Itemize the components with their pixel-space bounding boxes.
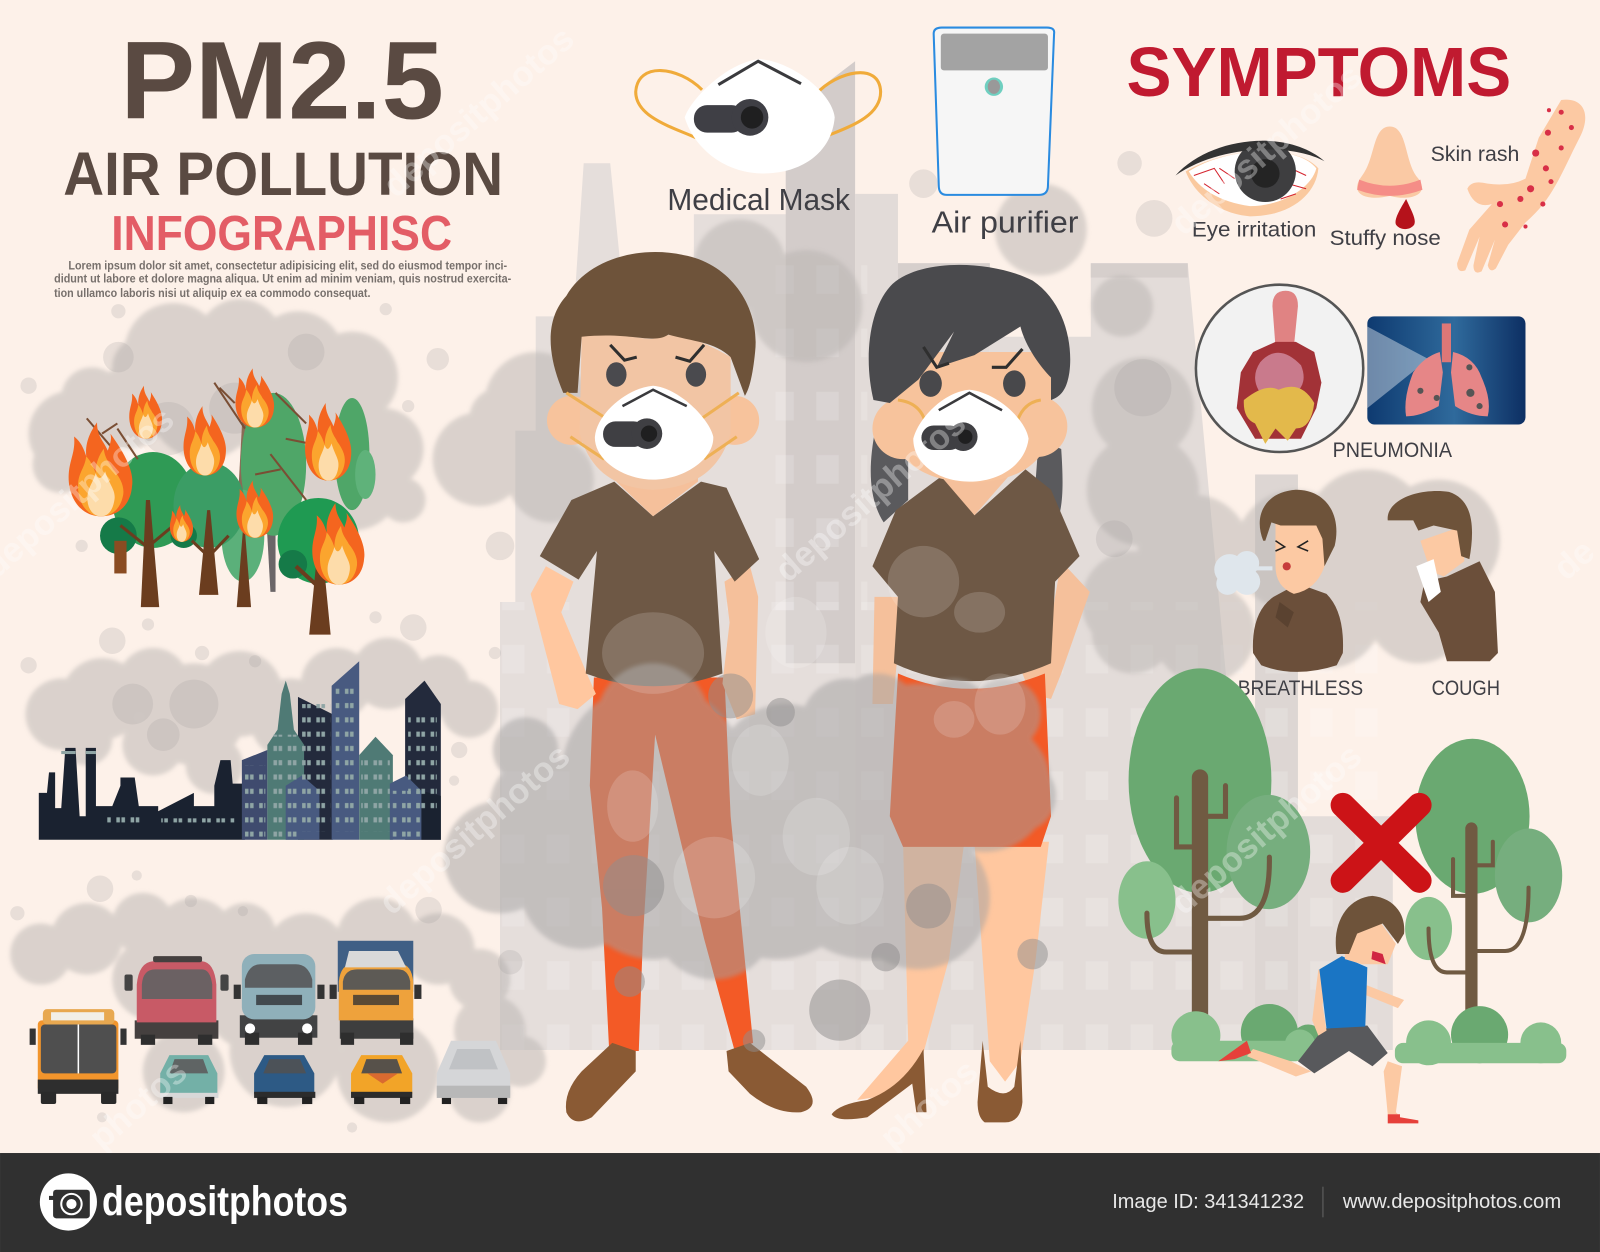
icon: nose [1357, 127, 1422, 229]
icon: teal car [160, 1055, 218, 1104]
figure: breathless man [1214, 490, 1343, 672]
icon: red truck [125, 956, 229, 1045]
icon: teal truck [234, 954, 325, 1045]
figure: coughing man [1388, 491, 1498, 661]
shoes [1388, 1114, 1418, 1123]
icon: camera logo [40, 1173, 97, 1231]
watermark: depositphotos [1164, 57, 1369, 243]
logo wordmark: depositphotos [102, 1177, 348, 1224]
right tree [1405, 739, 1562, 1020]
footer bar [0, 1153, 1600, 1252]
ears [872, 398, 934, 459]
forest fire smoke [20, 299, 449, 641]
skyscrapers [242, 750, 267, 840]
flames [69, 368, 364, 585]
watermark: depositphotos [768, 404, 973, 590]
website url: www.depositphotos.com [1342, 1191, 1561, 1213]
icon: grey car [437, 1041, 510, 1104]
left tree [1118, 668, 1310, 1025]
legs [1384, 1061, 1402, 1114]
smoke over figures [444, 546, 1056, 1052]
heading: infographisc: INFOGRAPHISC [111, 207, 452, 261]
illustration: vehicles [30, 941, 510, 1104]
illustration: forest fire [69, 368, 376, 635]
label: breathless: BREATHLESS [1238, 676, 1363, 700]
icon: orange car [351, 1055, 412, 1104]
icon: air purifier [934, 28, 1054, 195]
icon: medical mask [636, 59, 881, 173]
label: cough: COUGH [1432, 676, 1500, 700]
illustration: trees [1118, 668, 1566, 1065]
hair [1336, 896, 1404, 954]
city smoke [20, 628, 501, 794]
hair [869, 265, 1070, 403]
icon: lungs x-ray [1367, 316, 1525, 424]
face [1345, 918, 1396, 964]
background city buildings [500, 61, 1393, 1050]
mask [898, 390, 1041, 482]
icon: orange bus [30, 1009, 127, 1104]
icon: arm with rash [1457, 100, 1585, 273]
text block: lorem ipsum: tion ullamco laboris nisi ut aliquip ex ea commodo consequat. [54, 286, 370, 300]
figure: runner [1218, 896, 1418, 1123]
arms [1312, 969, 1404, 1036]
text block: lorem ipsum: Lorem ipsum dolor sit amet, consectetur adipisicing elit, sed do eiusmod tempor inci- [68, 258, 507, 272]
breath puff [1214, 551, 1272, 595]
burning background trees [87, 383, 376, 635]
trousers [590, 678, 753, 1051]
label: eye irritation: Eye irritation [1192, 218, 1316, 242]
title [54, 19, 511, 300]
face [580, 334, 731, 490]
legs [857, 842, 964, 1100]
shorts [1298, 1025, 1388, 1073]
eyes and brows [919, 347, 1026, 397]
back hair [871, 429, 1063, 522]
arms [531, 566, 596, 709]
heading: PM2.5: PM2.5 [120, 19, 444, 142]
face [890, 352, 1051, 483]
icon: red cross [1343, 805, 1419, 881]
neck [939, 464, 1010, 515]
blue shirt [1319, 956, 1367, 1029]
watermark: depositphotos [376, 20, 582, 205]
shoes [566, 1043, 813, 1121]
watermark: photos [873, 1052, 985, 1157]
hair [551, 252, 756, 396]
icon: irritated eye [1175, 141, 1324, 216]
watermark: photos [82, 1052, 195, 1157]
text block: lorem ipsum: didunt ut labore et dolore magna aliqua. Ut enim ad minim veniam, quis nostrud exercita- [54, 272, 511, 286]
shoes [832, 1041, 1022, 1122]
image id: Image ID: 341341232 [1112, 1191, 1304, 1213]
text block: lorem ipsum [54, 258, 511, 300]
ears [547, 396, 596, 445]
bushes [1171, 1004, 1566, 1065]
icon: infected alveoli [1196, 285, 1363, 452]
heading: air pollution: AIR POLLUTION [63, 140, 503, 208]
label: pneumonia: PNEUMONIA [1333, 438, 1453, 462]
label: skin rash: Skin rash [1431, 142, 1519, 166]
shirt [872, 469, 1080, 681]
mask [566, 386, 739, 480]
icon: blue car [254, 1055, 315, 1104]
label: medical mask: Medical Mask [667, 183, 851, 217]
icon: yellow truck [330, 941, 421, 1045]
shirt [540, 482, 759, 686]
neck [616, 471, 698, 516]
smoke behind figures [433, 151, 1500, 684]
illustration: factory and city skyline [39, 661, 441, 840]
arms [872, 597, 903, 704]
label: stuffy nose: Stuffy nose [1330, 226, 1441, 250]
traffic smoke [10, 870, 546, 1133]
factory silhouette [39, 748, 245, 840]
eyes and brows [606, 345, 706, 387]
figure: woman [832, 265, 1090, 1122]
figure: man [531, 252, 813, 1121]
watermark: depositphotos [372, 737, 577, 922]
label: air purifier: Air purifier [932, 206, 1079, 240]
heading: symptoms: SYMPTOMS [1127, 33, 1511, 111]
skirt [890, 673, 1051, 847]
watermark: depositphotos [1164, 737, 1369, 922]
